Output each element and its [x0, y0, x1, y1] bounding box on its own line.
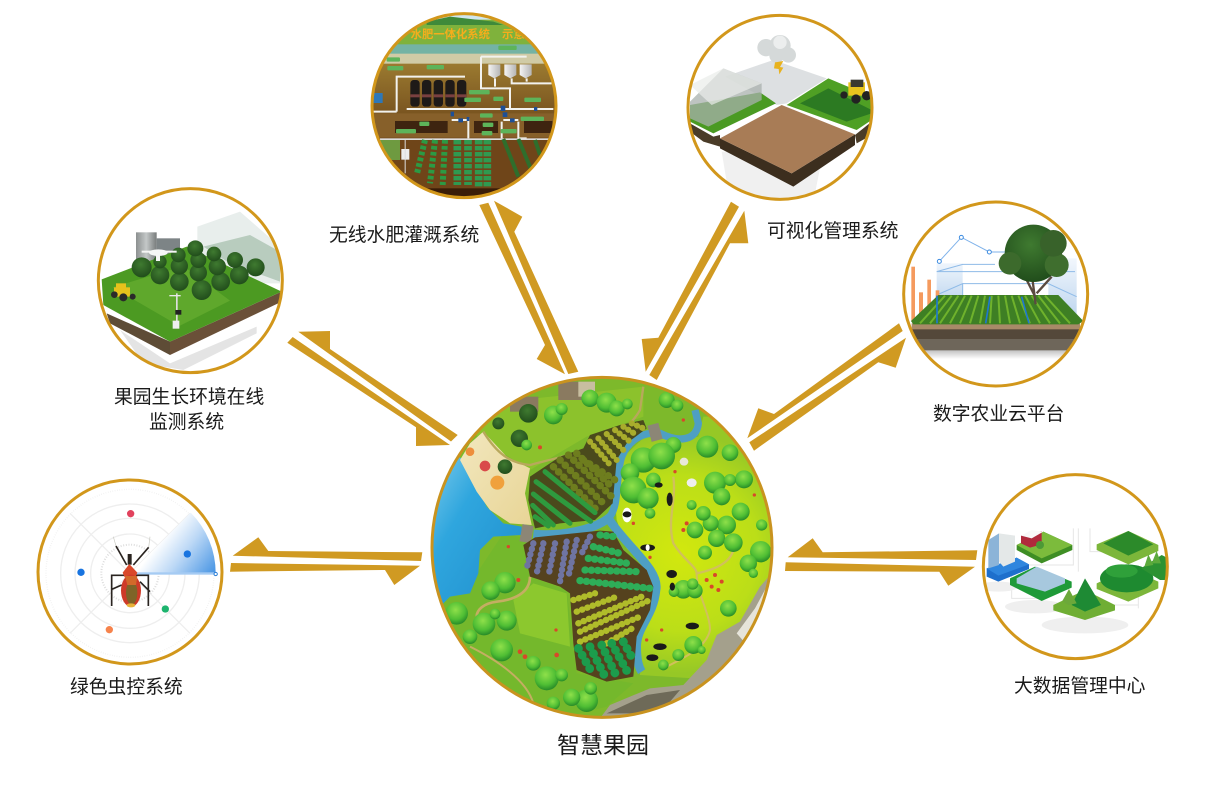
- tractor: [840, 80, 871, 104]
- line chart: [937, 235, 1010, 263]
- arrow: big data center and smart orchard: [785, 538, 977, 586]
- soft shadows: [978, 582, 1128, 633]
- title: smart orchard: 智慧果园: [557, 732, 649, 758]
- tree: [999, 225, 1069, 304]
- paths: [483, 387, 643, 465]
- water tank: [373, 93, 383, 103]
- black tanks: [410, 80, 466, 107]
- label: pest control: 绿色虫控系统: [70, 676, 183, 697]
- barn tile: [1017, 530, 1072, 563]
- silos: [136, 232, 157, 264]
- shadow: [925, 349, 1082, 359]
- greenhouse: [197, 212, 280, 283]
- pits: [395, 121, 552, 133]
- panel: green pest control radar: [30, 470, 230, 670]
- panel: orchard environment monitoring: [96, 187, 284, 374]
- ring: [38, 480, 222, 664]
- soil strata: [912, 323, 1080, 330]
- right meadow: [615, 417, 773, 680]
- panel: digital agriculture cloud platform: [895, 195, 1095, 395]
- circuit lines: [1012, 528, 1142, 608]
- buildings: [558, 382, 595, 400]
- green tags: [387, 46, 544, 135]
- ground shadow: [120, 327, 257, 370]
- mountain tile: [1053, 578, 1115, 620]
- tree tile: [1141, 551, 1168, 580]
- earth sides: [107, 313, 170, 355]
- lightning: [774, 61, 783, 74]
- label: wireless irrigation: 无线水肥灌溉系统: [329, 224, 479, 245]
- ring: [432, 377, 772, 717]
- grid lines: [937, 264, 1077, 297]
- ring: [372, 14, 556, 198]
- trees: [445, 390, 771, 712]
- soil plot: [720, 134, 855, 187]
- label: big data: 大数据管理中心: [1014, 675, 1146, 696]
- left grass: [690, 92, 776, 133]
- orchard trees: [132, 240, 265, 300]
- cloud: [757, 35, 796, 63]
- greenhouse tile: [1010, 567, 1072, 601]
- scan sector: [130, 513, 216, 573]
- parasols: [480, 461, 490, 471]
- grass: [102, 247, 282, 342]
- ring: [688, 15, 872, 199]
- grey plate: [736, 60, 826, 105]
- bridges: [520, 524, 534, 543]
- radar rings: [46, 489, 214, 657]
- target dots: [77, 510, 217, 633]
- drip line: [380, 138, 550, 140]
- orchard tile: [1097, 564, 1158, 602]
- blue walls: [937, 263, 963, 323]
- flowers: [507, 418, 756, 659]
- label: visual management: 可视化管理系统: [767, 220, 898, 241]
- arrow: visual management system and smart orchard: [642, 202, 748, 380]
- sea: [434, 458, 522, 604]
- ring: [983, 475, 1167, 659]
- arrow: pest control system and smart orchard: [230, 537, 422, 585]
- label: monitoring: 果园生长环境在线: [114, 386, 264, 407]
- palms: [492, 404, 538, 474]
- drone: [142, 249, 177, 261]
- panel: smart orchard central map: [430, 376, 774, 719]
- label: cloud platform: 数字农业云平台: [933, 403, 1064, 424]
- panel: big data management center: [975, 465, 1175, 665]
- crop field: [911, 295, 1083, 324]
- beach: [460, 432, 532, 525]
- white tanks: [488, 64, 532, 78]
- cows: [622, 458, 699, 661]
- arrow: irrigation system and smart orchard: [479, 201, 578, 374]
- crops: [457, 140, 487, 187]
- sensor station: [169, 293, 181, 329]
- blue platform with buildings: [987, 533, 1029, 582]
- pipes: [370, 57, 553, 138]
- title sign text: 水肥一体化系统: [411, 27, 491, 41]
- plain field tile: [1097, 531, 1158, 564]
- arrow: cloud platform and smart orchard: [747, 323, 906, 451]
- shadow grid: [722, 152, 820, 198]
- right grass: [787, 78, 872, 130]
- tractor: [111, 283, 136, 301]
- panel: visual management system: [686, 14, 874, 201]
- river: [533, 518, 656, 672]
- rocks: [602, 578, 768, 716]
- weather station: [401, 149, 409, 160]
- ring: [904, 202, 1088, 386]
- greenhouse: [690, 68, 762, 127]
- upper field: [528, 420, 647, 528]
- arrow: monitoring system and smart orchard: [287, 331, 458, 446]
- ring: [98, 189, 282, 373]
- lower field: [523, 531, 653, 682]
- panel: wireless irrigation system: 示意图: [502, 27, 536, 41]
- panel: wireless irrigation system: [370, 12, 560, 202]
- label: monitoring second line: 监测系统: [149, 411, 224, 432]
- bars: [911, 267, 939, 322]
- valves: [451, 106, 537, 122]
- bug: [112, 537, 150, 607]
